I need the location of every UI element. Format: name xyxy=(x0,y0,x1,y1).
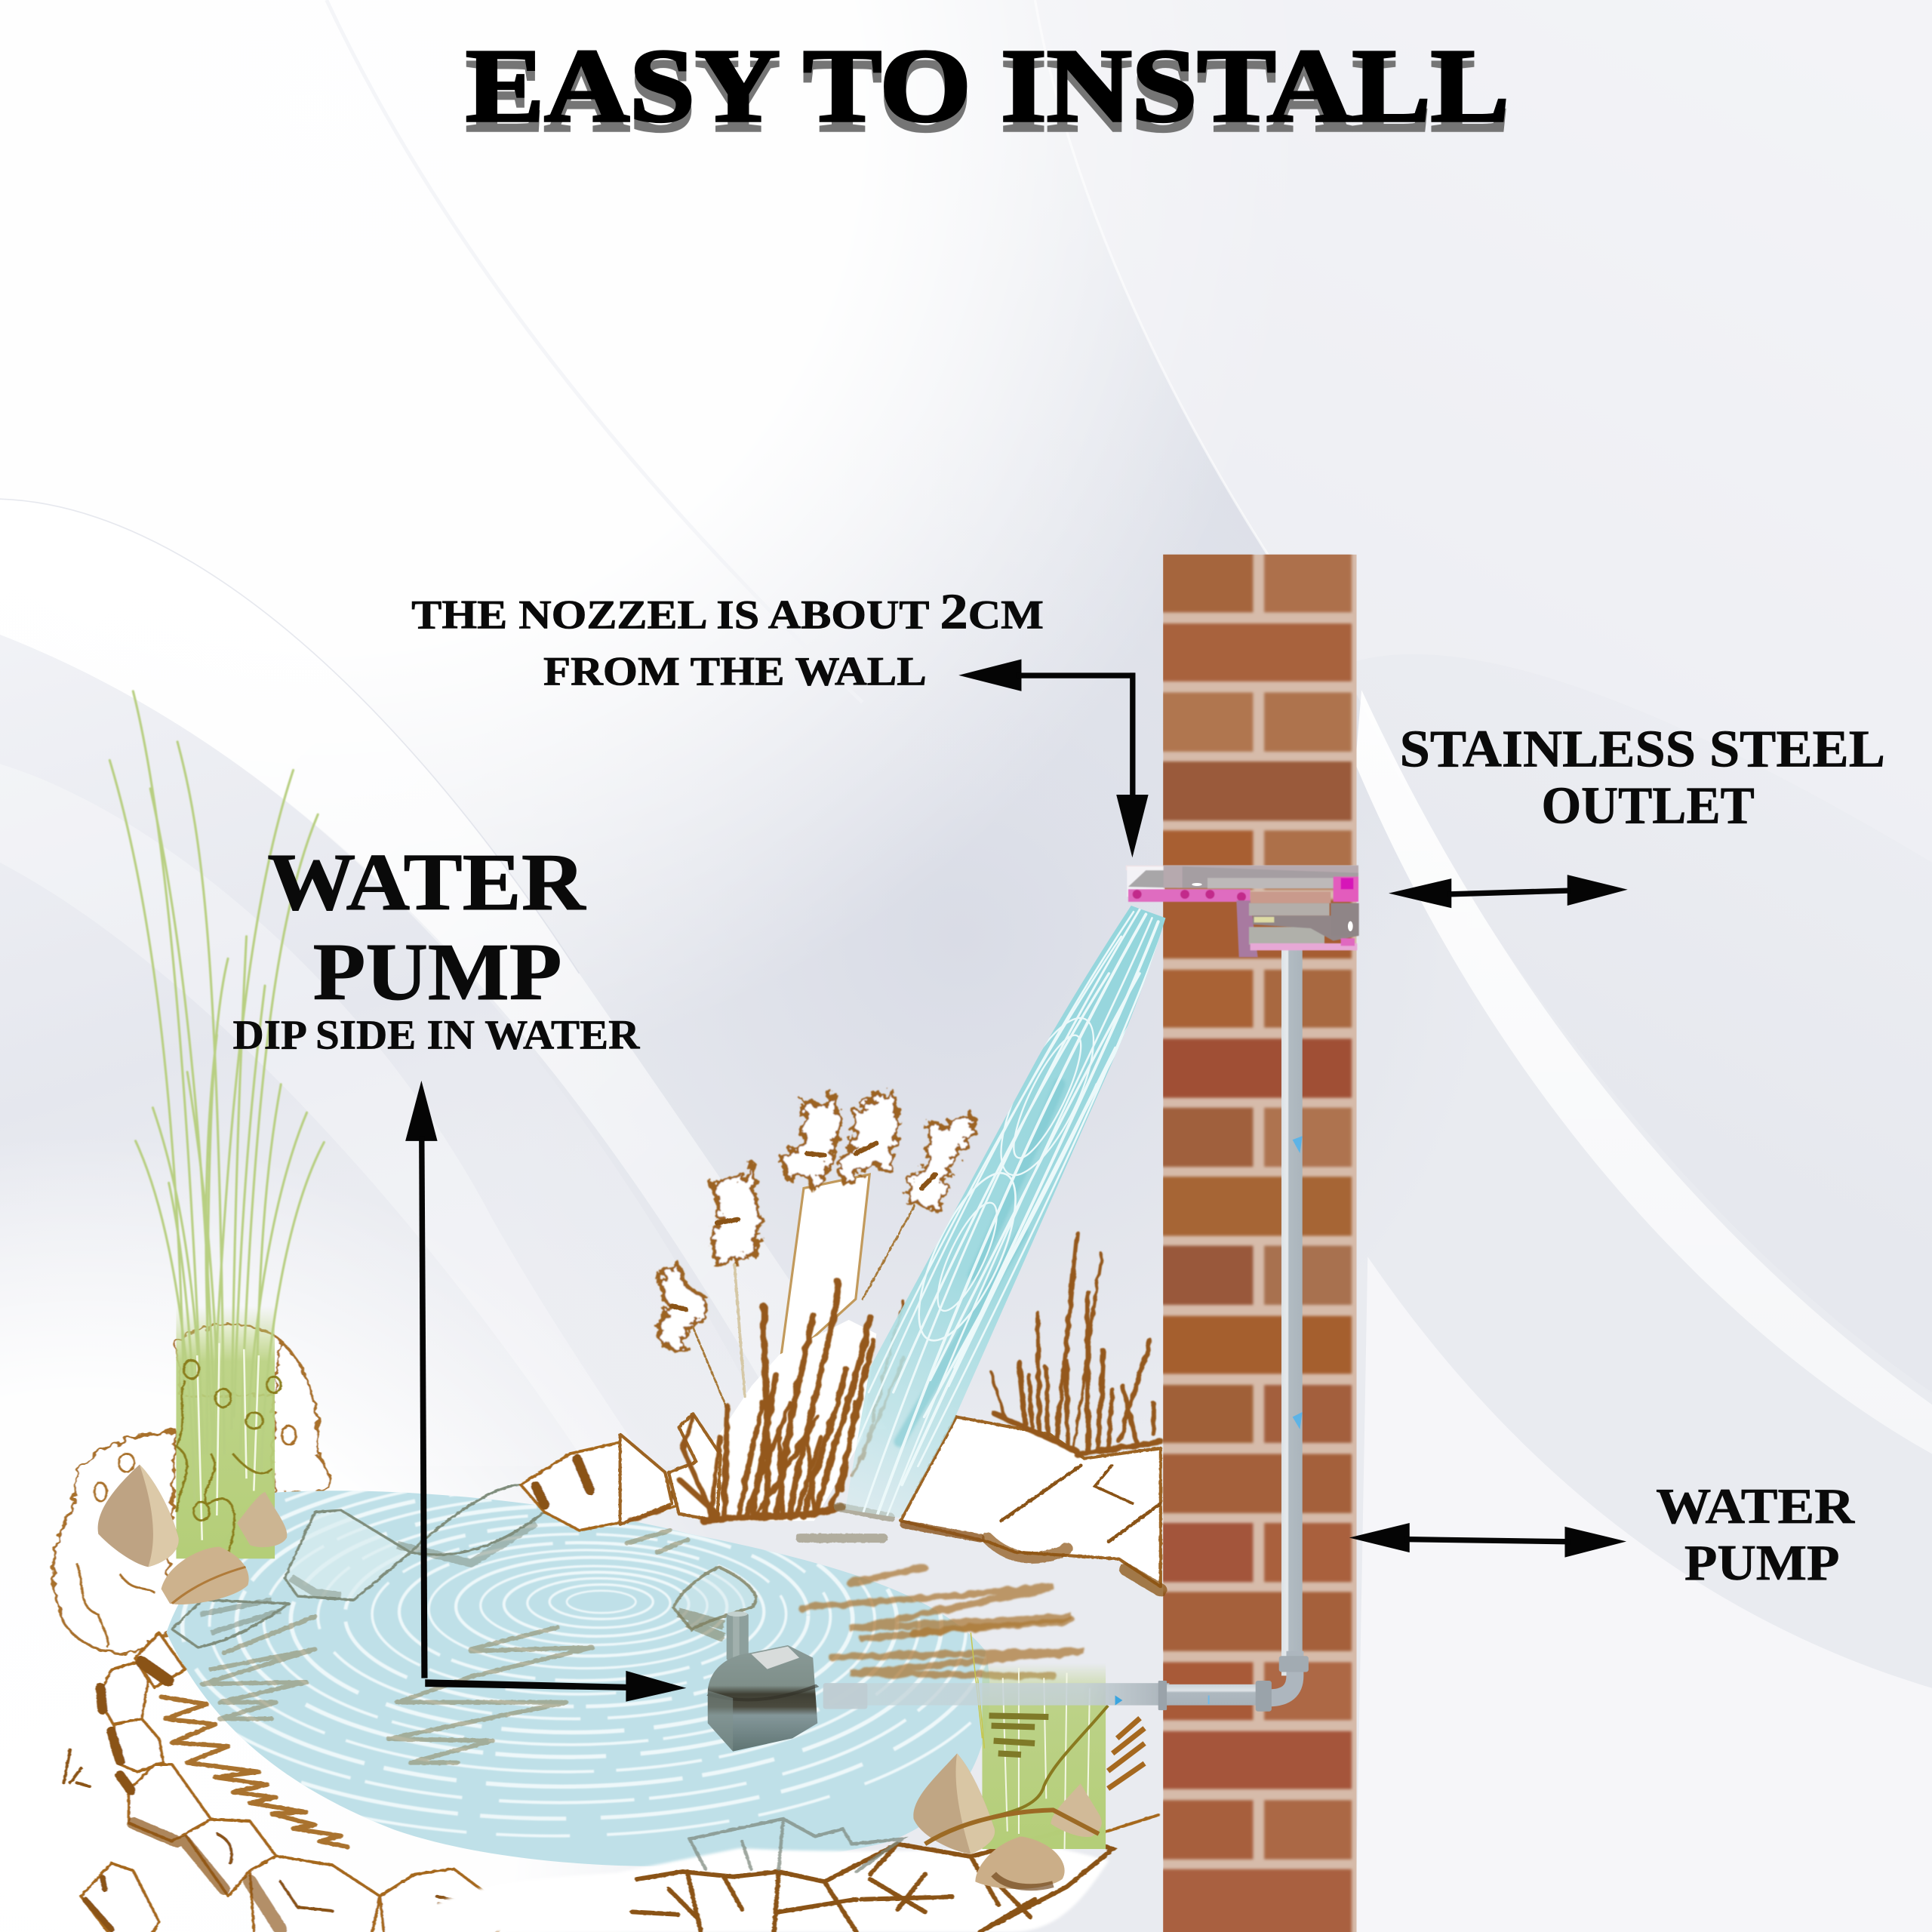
left bush sketch xyxy=(54,1324,330,1654)
pond water with ripples xyxy=(166,1491,989,1866)
arrow: dip side to pump xyxy=(405,1081,686,1702)
water pump heading: DIP SIDE IN WATER xyxy=(233,1012,640,1058)
arrow: nozzle distance xyxy=(958,659,1149,857)
stainless steel outlet xyxy=(1126,866,1359,957)
left tuft blades xyxy=(630,1281,904,1521)
right grass clump with rocks xyxy=(913,1632,1145,1889)
brown ripple strokes right of pump xyxy=(801,1567,1084,1675)
sketched stone near pump xyxy=(673,1567,756,1638)
stainless steel outlet label xyxy=(1400,720,1885,835)
stones in the water xyxy=(172,1484,545,1647)
faded ripple sketches in the water xyxy=(202,1531,688,1763)
arrow: stainless steel outlet xyxy=(1389,875,1628,908)
rock details xyxy=(800,1466,1161,1590)
vertical and horizontal water pipe xyxy=(823,949,1309,1712)
right tuft blades xyxy=(991,1233,1161,1455)
waterfall from nozzle into pond xyxy=(845,906,1165,1521)
flower centres and stems xyxy=(672,1143,935,1410)
water pump right label: PUMP xyxy=(1684,1535,1840,1591)
water pump right label: WATER xyxy=(1656,1478,1855,1534)
white plant and stalk fills xyxy=(672,1174,876,1521)
zigzag ripple lines at left rim xyxy=(162,1697,347,1847)
stainless steel outlet label: OUTLET xyxy=(1541,777,1755,835)
iris flowers xyxy=(658,1091,972,1351)
water pump body xyxy=(708,1611,817,1752)
rocks and stones around pond xyxy=(63,1441,692,1932)
shore rocks xyxy=(620,1414,1161,1586)
nozzle distance label: FROM THE WALL xyxy=(543,649,927,694)
arrow: water pump on wall xyxy=(1349,1523,1626,1558)
brick wall xyxy=(1158,549,1357,1932)
sketched pond rim stones xyxy=(81,1441,679,1932)
bottom rim stones and lotus sketch xyxy=(394,1815,1158,1932)
stainless steel outlet label: STAINLESS STEEL xyxy=(1400,720,1885,779)
tan rocks left xyxy=(98,1465,287,1604)
water pump right label xyxy=(1656,1478,1855,1591)
nozzle distance label xyxy=(411,584,1044,694)
sketched iris plants and shore rocks xyxy=(620,1091,1161,1590)
title: EASY TO INSTALL xyxy=(466,28,1509,144)
left grass clump xyxy=(77,691,324,1647)
water pump heading xyxy=(233,838,640,1058)
nozzle distance label: THE NOZZEL IS ABOUT 2CM xyxy=(411,584,1044,640)
water pump heading: WATER xyxy=(267,838,586,928)
water pump heading: PUMP xyxy=(313,928,561,1017)
